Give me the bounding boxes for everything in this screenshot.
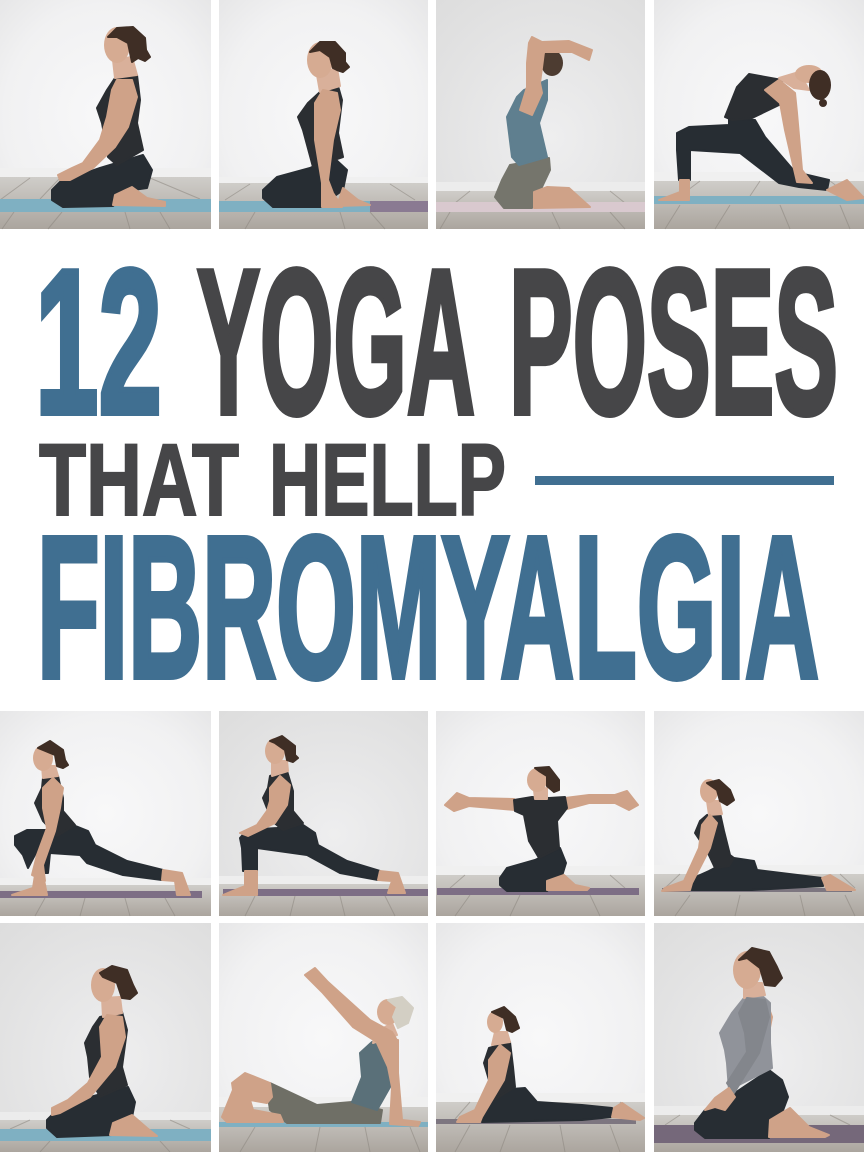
mat: [662, 888, 852, 892]
title block: [35, 227, 838, 720]
panel: pose 8 seated pigeon upward gaze: [654, 711, 864, 916]
mat: [654, 196, 864, 204]
mat: [436, 1119, 636, 1124]
panel: pose 10 reclined arm raised: [219, 923, 428, 1152]
figure: [52, 27, 165, 207]
panel: pose 2 kneeling three-quarter: [219, 0, 428, 229]
figure: [12, 741, 190, 895]
panel: pose 5 low lunge: [0, 711, 211, 916]
figure: [263, 42, 370, 207]
title block: YOGA: [197, 227, 475, 457]
figure: [223, 736, 405, 895]
mat: [219, 201, 428, 212]
panel: pose 3 arms overhead: [436, 0, 645, 229]
figure: [445, 767, 638, 891]
panel: pose 11 low cobra: [436, 923, 645, 1152]
panel: pose 4 lunge backbend: [654, 0, 864, 229]
panel: pose 6 low lunge hand on knee: [219, 711, 428, 916]
mat: [0, 1129, 211, 1141]
mat: [223, 889, 428, 896]
mat: [219, 1122, 428, 1127]
subheading: THAT: THAT: [39, 423, 239, 537]
panel: pose 12 kneeling grey top: [654, 923, 864, 1152]
subheading: HELLP: HELLP: [269, 423, 506, 537]
mat: [654, 1125, 864, 1143]
figure: [457, 1007, 644, 1122]
figure: [222, 968, 420, 1126]
figure: [695, 948, 829, 1138]
figure: [47, 966, 157, 1137]
panel: pose 9 kneeling profile: [0, 923, 211, 1152]
mat: [436, 202, 645, 212]
mat: [0, 891, 202, 898]
divider rule: [535, 476, 834, 485]
figure: [662, 779, 855, 891]
mat: [0, 199, 211, 212]
heading: number 12: 12: [35, 227, 162, 457]
panel: pose 1 kneeling profile: [0, 0, 211, 229]
panel: pose 7 kneeling arms out: [436, 711, 645, 916]
figure: [495, 37, 592, 208]
figure: [659, 65, 864, 200]
mat: [437, 888, 639, 895]
